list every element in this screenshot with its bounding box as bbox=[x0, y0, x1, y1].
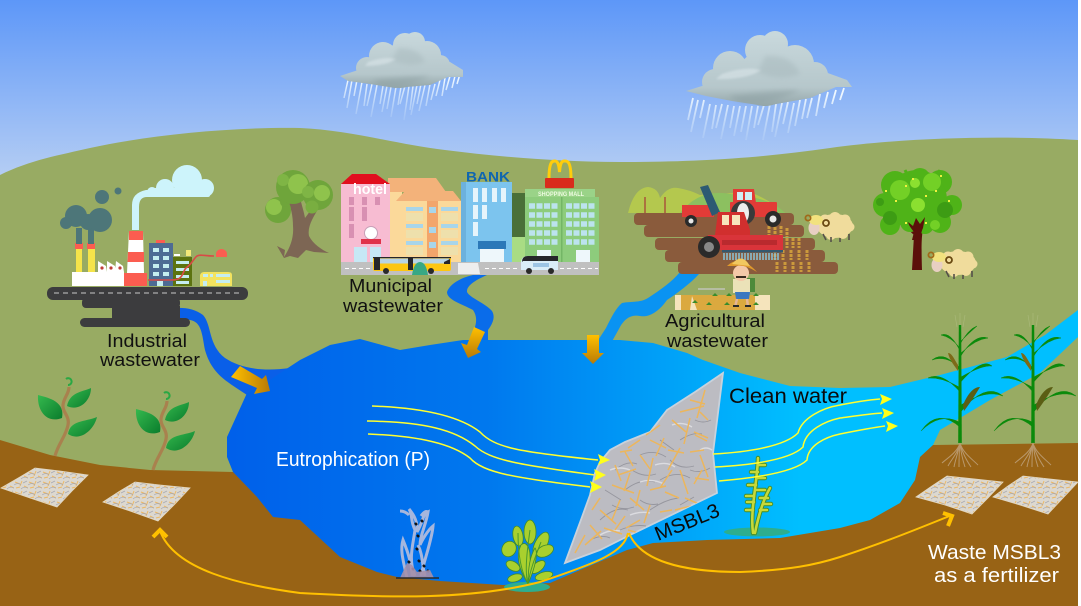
arrow: industrial inflow bbox=[231, 366, 270, 394]
arrows: eutrophic inflow lines bbox=[367, 406, 598, 487]
rain cloud left bbox=[340, 32, 463, 120]
icon: left sprouts bbox=[38, 378, 195, 470]
icon: shopping mall bbox=[512, 161, 599, 262]
icon: golden arches bbox=[549, 161, 571, 179]
river: industrial inflow bbox=[157, 308, 300, 400]
icon: ploughed soil rows bbox=[634, 213, 838, 274]
panel: industrial zone bbox=[47, 165, 248, 327]
icon: red harvester bbox=[698, 212, 783, 260]
panel: municipal city block bbox=[341, 161, 599, 275]
icon: street bbox=[341, 262, 599, 275]
icon: second sheep bbox=[928, 249, 978, 279]
label: waste MSBL3 as a fertilizer: Waste MSBL3 bbox=[928, 542, 1061, 564]
icon: hotel bbox=[341, 174, 390, 263]
icon: distant trees and field bbox=[628, 187, 785, 213]
icon: sheep bbox=[805, 212, 854, 242]
label: waste MSBL3 as a fertilizer: as a fertilizer bbox=[934, 565, 1059, 587]
arrow: recycle to left field bbox=[153, 530, 628, 596]
icon: coach bbox=[521, 256, 558, 274]
icon: wheat bbox=[769, 226, 809, 272]
green hill landscape bbox=[0, 128, 1078, 606]
label: eutrophication: Eutrophication (P) bbox=[276, 449, 430, 471]
label: municipal wastewater: Municipal bbox=[349, 275, 432, 296]
icon: oak tree bbox=[265, 170, 333, 258]
icon: MSBL3 mesh bag bbox=[565, 373, 723, 563]
arrows: clean water outflow lines bbox=[713, 399, 885, 481]
label: industrial wastewater: Industrial bbox=[107, 330, 187, 351]
arrowheads: inflow bbox=[590, 454, 610, 493]
arrow: agricultural inflow bbox=[582, 335, 604, 364]
river: agricultural inflow bbox=[595, 272, 699, 345]
panel: farm bbox=[628, 185, 854, 310]
icon: yellow bus bbox=[373, 257, 451, 275]
icon: green leafy tree bbox=[873, 168, 962, 270]
label: agricultural wastewater: wastewater bbox=[666, 330, 768, 351]
icon: left mesh bags bbox=[1, 468, 190, 521]
icon: field and sprayer ground bbox=[675, 293, 770, 310]
icon: power plant bbox=[60, 165, 232, 286]
rain cloud right bbox=[686, 31, 852, 140]
river: municipal inflow bbox=[447, 275, 494, 345]
icon: red tractor bbox=[682, 185, 781, 227]
icon: right mesh bags bbox=[916, 476, 1078, 514]
soil ground bbox=[0, 440, 1078, 606]
mall sign: SHOPPING MALL bbox=[538, 191, 584, 198]
label: agricultural wastewater: Agricultural bbox=[665, 310, 765, 331]
label: clean water: Clean water bbox=[729, 385, 847, 408]
arrow: recycle to right field bbox=[629, 513, 952, 572]
label: MSBL3: MSBL3 bbox=[652, 500, 723, 546]
icon: green seaweed bbox=[499, 520, 555, 592]
arrowheads: outflow bbox=[880, 394, 898, 432]
icon: yellow-green water plant bbox=[724, 458, 790, 536]
icon: grey seaweed bbox=[396, 509, 439, 578]
icon: apartment buildings bbox=[388, 178, 461, 262]
icon: corn plants bbox=[921, 313, 1076, 467]
icon: farmer bbox=[698, 258, 757, 307]
icon: road and asphalt spill bbox=[47, 287, 248, 327]
hotel sign: hotel bbox=[353, 182, 387, 198]
sky background bbox=[0, 0, 1078, 175]
label: municipal wastewater: wastewater bbox=[342, 295, 443, 316]
bank sign: BANK bbox=[466, 168, 510, 184]
icon: bank bbox=[461, 168, 512, 262]
label: industrial wastewater: wastewater bbox=[99, 349, 200, 370]
arrow: municipal inflow bbox=[461, 327, 485, 358]
lake and clean water river bbox=[227, 310, 1078, 585]
